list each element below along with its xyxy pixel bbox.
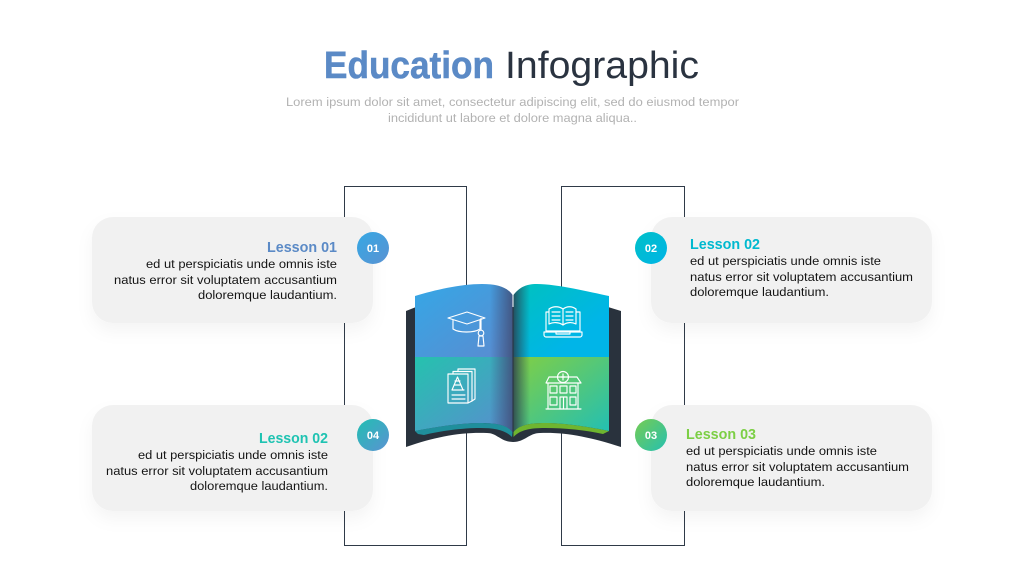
badge 04: 04 (367, 430, 380, 442)
icon: laptop with book (544, 307, 582, 337)
panel: lesson 02 left: ed ut perspiciatis unde omnis iste (138, 448, 328, 462)
icon: document stack (448, 369, 475, 403)
subtitle (286, 95, 739, 125)
panel: lesson 03: Lesson 03 (686, 427, 756, 443)
panel: lesson 02 left: natus error sit voluptatem accusantium (106, 464, 328, 478)
title: Infographic (505, 45, 699, 87)
panel: lesson 01: Lesson 01 (267, 240, 337, 256)
icon: school building (546, 372, 581, 409)
panel: lesson 02 right: Lesson 02 (690, 237, 760, 253)
title: Education (324, 45, 494, 87)
panel: lesson 03 (651, 405, 932, 511)
open book (406, 284, 621, 447)
panel: lesson 02 right (651, 217, 932, 323)
panel: lesson 03: doloremque laudantium. (686, 475, 825, 489)
panel: lesson 02 left (92, 405, 373, 511)
panel: lesson 02 right: natus error sit voluptatem accusantium (690, 270, 913, 284)
book cover (406, 307, 621, 447)
connector frame left (344, 186, 466, 546)
subtitle: Lorem ipsum dolor sit amet, consectetur adipiscing elit, sed do eiusmod tempor (286, 95, 739, 109)
title (324, 45, 699, 87)
panel: lesson 03: ed ut perspiciatis unde omnis iste (686, 444, 877, 458)
subtitle: incididunt ut labore et dolore magna aliqua.. (388, 111, 637, 125)
right page (513, 284, 610, 434)
panel: lesson 02 right: doloremque laudantium. (690, 285, 829, 299)
badge 03: 03 (645, 430, 657, 442)
panel: lesson 02 right: ed ut perspiciatis unde omnis iste (690, 254, 881, 268)
badge 03 (635, 419, 667, 451)
panel: lesson 01 (92, 217, 373, 323)
panel: lesson 01: doloremque laudantium. (198, 288, 337, 302)
badge 02: 02 (645, 243, 657, 255)
badge 04 (357, 419, 389, 451)
panel: lesson 03: natus error sit voluptatem accusantium (686, 460, 909, 474)
left page (415, 284, 513, 434)
panel: lesson 01: natus error sit voluptatem accusantium (114, 273, 337, 287)
badge 01: 01 (367, 243, 379, 255)
panel: lesson 02 left: doloremque laudantium. (190, 479, 328, 493)
badge 02 (635, 232, 667, 264)
panel: lesson 02 left: Lesson 02 (259, 431, 328, 447)
panel: lesson 01: ed ut perspiciatis unde omnis iste (146, 257, 337, 271)
badge 01 (357, 232, 389, 264)
connector frame right (562, 186, 684, 546)
page edges (415, 423, 512, 437)
icon: graduation cap (448, 312, 485, 346)
